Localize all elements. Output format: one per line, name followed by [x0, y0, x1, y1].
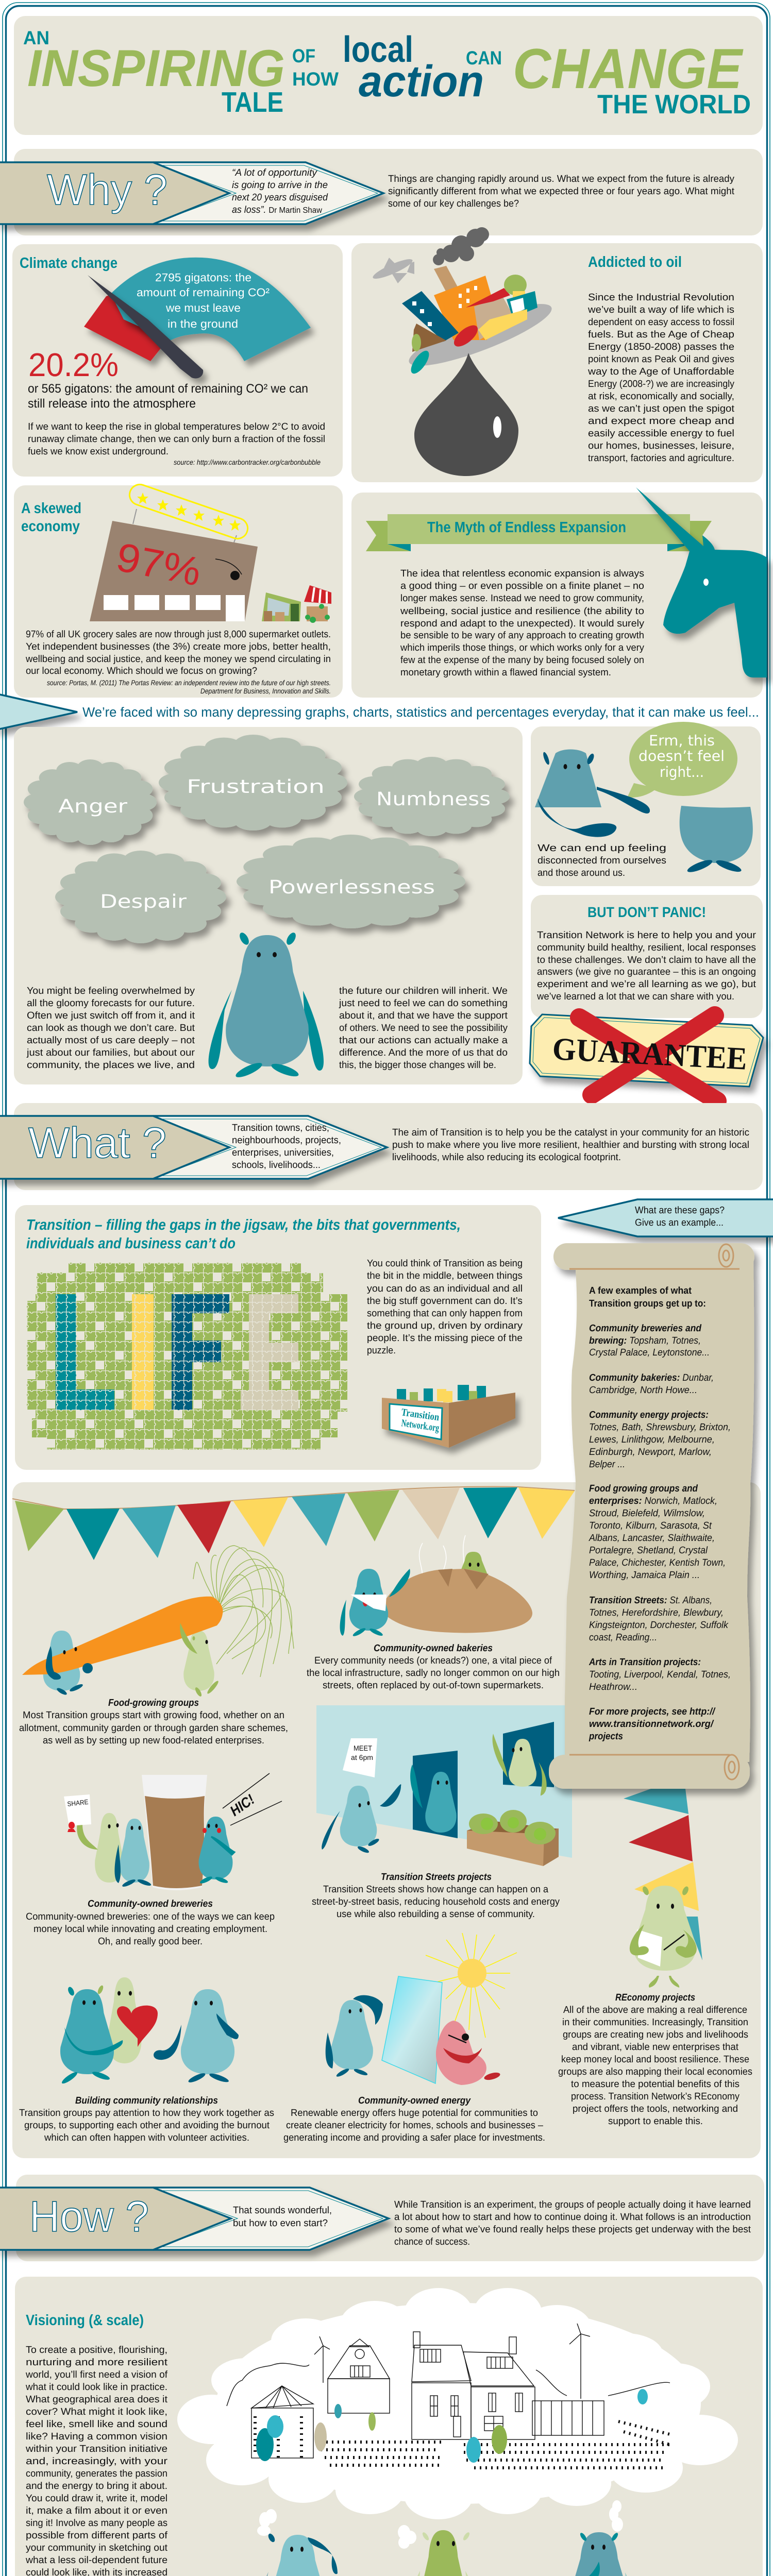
panel: title	[14, 16, 763, 135]
how arrow text: That sounds wonderful,	[233, 2205, 332, 2216]
panel: why	[0, 149, 763, 235]
oil text: transport, factories and agriculture.	[588, 453, 734, 464]
scroll text: For more projects, see http://	[589, 1706, 716, 1717]
energy text: generating income and providing a safer place for investments.	[283, 2132, 545, 2143]
jigsaw text: the ground up, driven by ordinary	[367, 1320, 523, 1331]
heading	[26, 1217, 461, 1252]
reconomy text: REconomy projects	[615, 1992, 695, 2003]
climate text: runaway climate change, then we can only burn a fraction of the fossil	[28, 434, 325, 445]
cloud: frustration	[159, 735, 347, 831]
visioning text: nurturing and more resilient	[26, 2357, 168, 2368]
quote: is going to arrive in the	[232, 180, 328, 191]
feelings text: that our actions can actually make a	[339, 1035, 508, 1046]
oil text: easily accessible energy to fuel	[588, 428, 734, 439]
feelings text: of others. We need to see the possibility	[339, 1023, 508, 1033]
scroll text: Transition Streets: St. Albans,	[589, 1595, 712, 1606]
reconomy text: in their communities. Increasingly, Transition	[562, 2017, 748, 2028]
visioning text: community, generates the passion	[26, 2468, 167, 2479]
jigsaw text: puzzle.	[367, 1345, 396, 1356]
ribbon heading: The Myth of Endless Expansion	[427, 519, 626, 536]
scroll text: Tooting, Liverpool, Kendal, Totnes,	[589, 1669, 731, 1680]
visioning text: feel like, smell like and sound	[26, 2419, 167, 2430]
streets text: street-by-street basis, reducing household costs and energy	[312, 1896, 560, 1907]
heading: BUT DON’T PANIC!	[587, 904, 706, 920]
title text	[23, 27, 751, 120]
climate text: If we want to keep the rise in global temperatures below 2°C to avoid	[28, 421, 325, 432]
panic text: we’ve learned a lot that we can share with you.	[536, 991, 734, 1002]
why intro text: significantly different from what we expected three or four years ago. What might	[388, 186, 735, 197]
cloud: anger: Anger	[58, 796, 127, 817]
heading: A skewed	[21, 500, 81, 517]
breweries text: Community-owned breweries	[88, 1899, 213, 1909]
icon: supermarket	[90, 482, 258, 621]
energy text	[283, 2095, 545, 2143]
heading: Visioning (& scale)	[26, 2312, 144, 2329]
title text: CAN	[466, 47, 502, 69]
bunting right side	[624, 1789, 702, 1960]
heading: how: How ?	[29, 2192, 149, 2241]
icon: crossed-out guarantee: GUARANTEE	[551, 1031, 748, 1077]
how intro text: chance of success.	[394, 2236, 470, 2247]
arrow: why banner	[0, 162, 383, 224]
relationships text	[19, 2095, 274, 2143]
feelings text: Often we just switch off from it, and it	[27, 1010, 195, 1021]
reconomy text: to measure the potential benefits of this	[571, 2079, 740, 2090]
quote: as loss”. Dr Martin Shaw	[232, 205, 322, 215]
skewed economy text: Yet independent businesses (the 3%) create more jobs, better health,	[26, 641, 331, 652]
reconomy text: groups are also mapping their local economies	[558, 2066, 752, 2077]
how intro text	[394, 2199, 751, 2247]
myth text: few at the expense of the many by being focused solely on	[400, 655, 644, 666]
bakeries text: streets, often replaced by out-of-town supermarkets.	[323, 1680, 544, 1691]
oil text: as we can’t just open the spigot	[588, 403, 735, 414]
myth text: The idea that relentless economic expansion is always	[400, 568, 644, 579]
icon: pint of beer and brewers	[64, 1773, 282, 1890]
scroll text: Heathrow...	[589, 1682, 637, 1692]
heading: Climate change	[20, 255, 117, 272]
oil text: point known as Peak Oil and gives	[588, 354, 734, 365]
visioning text: You could draw it, write it, model	[26, 2493, 167, 2504]
reconomy text: support to enable this.	[608, 2116, 703, 2127]
scroll text: Transition groups get up to:	[589, 1298, 706, 1309]
cloud: despair: Despair	[100, 891, 187, 912]
oil text: Energy (1850-2008) passes the	[588, 342, 734, 352]
cloud: frustration: Frustration	[187, 776, 325, 798]
what arrow text	[232, 1123, 341, 1171]
scroll text: Belper ...	[589, 1459, 625, 1470]
cloud: numbness: Numbness	[376, 789, 491, 810]
feelings text: the future our children will inherit. We	[339, 986, 508, 996]
jigsaw text: the bit in the middle, between things	[367, 1270, 523, 1281]
reconomy text: groups are creating new jobs and livelihoods	[563, 2029, 748, 2040]
panel: feelings	[14, 727, 523, 1084]
food-growing text: Most Transition groups start with growing food, whether on an	[23, 1710, 284, 1721]
title text: THE WORLD	[597, 90, 751, 120]
icon: reconomy character with clipboard	[630, 1886, 697, 1988]
scroll text: Cambridge, North Howe...	[589, 1385, 697, 1396]
icon: solar panel and sun	[326, 1933, 517, 2085]
umbrella label: amount of remaining CO²	[137, 286, 270, 299]
streets text: Transition Streets shows how change can happen on a	[323, 1884, 548, 1895]
feelings text: just about our families, but about our	[26, 1047, 195, 1058]
title text: CHANGE	[513, 37, 744, 100]
visioning text	[25, 2345, 168, 2576]
panic text: to these challenges. We don’t claim to have all the	[537, 955, 756, 965]
disconnected text	[537, 843, 666, 878]
breweries text: Community-owned breweries: one of the ways we can keep	[26, 1911, 275, 1922]
panel: how	[0, 2175, 764, 2261]
icon: supermarket: 97%	[113, 534, 205, 595]
heading: Addicted to oil	[588, 254, 682, 270]
scroll text: Totnes, Herefordshire, Blewbury,	[589, 1607, 724, 1618]
bakeries text: Community-owned bakeries	[374, 1643, 493, 1654]
icon: carrot and food growers	[22, 1546, 294, 1698]
energy text: Community-owned energy	[358, 2095, 471, 2106]
statistic caption	[28, 382, 308, 411]
why intro text: Things are changing rapidly around us. What we expect from the future is already	[388, 174, 734, 184]
panic text	[536, 930, 757, 1002]
character: overwhelmed	[209, 931, 324, 1080]
umbrella label: we must leave	[165, 301, 241, 314]
myth text: be sensible to be wary of any approach to creating growth	[400, 630, 644, 641]
scroll text: enterprises: Norwich, Matlock,	[589, 1496, 717, 1506]
visioning text: and the energy to bring it about.	[26, 2481, 167, 2492]
panel: what	[0, 1103, 763, 1190]
scroll text: Totnes, Bath, Shrewsbury, Brixton,	[589, 1422, 731, 1433]
how arrow text: but how to even start?	[233, 2218, 328, 2229]
title text: OF	[292, 45, 315, 66]
title text: AN	[23, 27, 49, 48]
scroll text: Community breweries and	[589, 1323, 701, 1334]
how arrow text	[233, 2205, 332, 2229]
feelings text: community, the places we live, and	[27, 1060, 195, 1071]
scroll of examples	[549, 1243, 754, 1789]
what intro text: The aim of Transition is to help you be the catalyst in your community for an historic	[392, 1127, 749, 1138]
arrow: what are these gaps: What are these gaps?	[635, 1205, 725, 1216]
umbrella label: in the ground	[167, 317, 238, 330]
relationships text: which can often happen with volunteer activities.	[44, 2132, 249, 2143]
bunting	[12, 1487, 575, 1560]
scroll text: Community energy projects:	[589, 1410, 709, 1420]
cloud: powerlessness: Powerlessness	[268, 877, 435, 898]
food-growing text: as well as by setting up new food-related enterprises.	[43, 1735, 264, 1746]
heading	[21, 500, 81, 535]
visioning text: what it could look like in practice.	[25, 2382, 167, 2393]
breweries text	[26, 1899, 275, 1947]
myth text: a good thing – or even possible on a finite planet – no	[400, 581, 644, 591]
visioning text: What geographical area does it	[26, 2394, 168, 2405]
scroll text: Palace, Chichester, Kentish Town,	[589, 1557, 726, 1568]
what arrow text: neighbourhoods, projects,	[232, 1135, 341, 1146]
energy text: Renewable energy offers huge potential for communities to	[291, 2108, 538, 2119]
oil text: dependent on easy access to fossil	[588, 317, 734, 328]
what intro text	[392, 1127, 749, 1163]
arrow: how banner	[0, 2188, 389, 2250]
scroll text: Albans, Lancaster, Slaithwaite,	[589, 1533, 715, 1544]
arrow: what are these gaps: Give us an example...	[635, 1217, 724, 1228]
food-growing text: allotment, community garden or through garden share schemes,	[19, 1723, 288, 1734]
scroll text: Toronto, Kilburn, Sarasota, St	[589, 1520, 712, 1531]
umbrella label	[137, 271, 270, 330]
skewed economy text: 97% of all UK grocery sales are now through just 8,000 supermarket outlets.	[26, 629, 331, 640]
how intro text: While Transition is an experiment, the groups of people actually doing it have learned	[394, 2199, 751, 2210]
panel: skewed economy	[14, 482, 343, 698]
scroll text: Stroud, Bielefeld, Wilmslow,	[589, 1508, 705, 1519]
scroll text: A few examples of what	[589, 1285, 692, 1296]
climate text: source: http://www.carbontracker.org/carbonbubble	[174, 458, 321, 466]
food-growing text: Food-growing groups	[108, 1698, 199, 1708]
icon: oil drop	[414, 353, 518, 476]
scroll text: brewing: Topsham, Totnes,	[589, 1335, 701, 1346]
bakeries text: Every community needs (or kneads?) one, a vital piece of	[314, 1655, 552, 1666]
icon: plane	[371, 256, 414, 283]
skewed economy text: Department for Business, Innovation and Skills.	[200, 687, 331, 695]
heading: Transition – filling the gaps in the jigsaw, the bits that governments,	[26, 1217, 461, 1233]
jigsaw text	[367, 1258, 523, 1356]
visioning text: world, you’ll first need a vision of	[25, 2369, 168, 2380]
oil text: at risk, economically and socially,	[588, 391, 734, 402]
title text: INSPIRING	[27, 40, 285, 97]
title text: local	[343, 29, 413, 70]
feelings text: You might be feeling overwhelmed by	[27, 986, 195, 996]
umbrella label: 2795 gigatons: the	[155, 271, 251, 284]
icon: crossed-out guarantee	[530, 1014, 763, 1101]
jigsaw text: the big stuff government can do. It’s	[367, 1296, 523, 1307]
jigsaw text: something that can only happen from	[367, 1308, 523, 1319]
climate text: fuels we know exist underground.	[28, 446, 169, 457]
heading: economy	[21, 518, 80, 535]
disconnected text: disconnected from ourselves	[537, 855, 666, 866]
what intro text: push to make where you live more resilient, healthier and bursting with strong local	[392, 1140, 749, 1150]
arrow: feelings banner	[0, 694, 77, 730]
energy text: create cleaner electricity for homes, schools and businesses –	[286, 2120, 543, 2131]
streets text	[312, 1872, 560, 1920]
heading: individuals and business can’t do	[26, 1235, 236, 1252]
speech bubble: Erm, this	[649, 732, 715, 749]
character: steel blue visionary	[564, 2532, 640, 2576]
statistic: 20.2%	[28, 346, 119, 383]
disconnected text: We can end up feeling	[537, 843, 666, 854]
relationships text: groups, to supporting each other and avoiding the burnout	[24, 2120, 270, 2131]
scroll text: www.transitionnetwork.org/	[589, 1719, 714, 1730]
panic text: community build healthy, resilient, local responses	[537, 942, 756, 953]
quote	[232, 167, 328, 215]
scroll text: projects	[589, 1731, 623, 1742]
myth text: longer makes sense. Instead we need to grow community,	[400, 593, 644, 604]
thought cloud	[177, 2288, 738, 2549]
arrow: what are these gaps	[558, 1199, 773, 1236]
visioning text: like? Having a common vision	[26, 2431, 167, 2442]
reconomy text: project offers the tools, networking and	[573, 2104, 738, 2114]
myth text	[400, 568, 645, 678]
icon: bakery loaf and bakers	[340, 1535, 532, 1637]
relationships text: Transition groups pay attention to how they work together as	[19, 2108, 274, 2119]
speech bubble: doesn’t feel	[638, 748, 725, 765]
icon: pint of beer and brewers: SHARE	[67, 1798, 89, 1808]
scroll text: Worthing, Jamaica Plain ...	[589, 1570, 700, 1581]
cloud: despair	[55, 851, 226, 943]
scroll text	[589, 1285, 731, 1742]
panic text: answers (we give no guarantee – this is an ongoing	[537, 967, 756, 977]
panel: visioning	[15, 2277, 763, 2576]
why intro text: some of our key challenges be?	[388, 198, 519, 209]
cloud: powerlessness	[237, 835, 465, 928]
oil text: way to the Age of Unaffordable	[587, 366, 734, 377]
relationships text: Building community relationships	[75, 2095, 218, 2106]
panel: myth of endless expansion	[351, 487, 767, 698]
reconomy text	[558, 1992, 752, 2127]
umbrella chart	[84, 258, 311, 379]
title text: TALE	[222, 86, 283, 118]
jigsaw text: you can do as an individual and all	[367, 1283, 523, 1294]
icon: smoke	[433, 227, 489, 265]
oil text: fuels. But as the Age of Cheap	[588, 329, 734, 340]
how intro text: to some of what we’ve found really helps these projects get underway with the best	[394, 2224, 751, 2235]
oil text: and expect more cheap and	[588, 416, 734, 427]
scroll text: Arts in Transition projects:	[589, 1657, 701, 1668]
myth text: respond and adapt to the unexpected). It would surely	[400, 618, 645, 629]
bakeries text: the local infrastructure, sadly no longer common on our high	[307, 1668, 560, 1679]
ribbon heading	[366, 514, 712, 551]
jigsaw spelling life	[27, 1263, 347, 1450]
feelings text: can look as though we don’t care. But	[27, 1023, 195, 1033]
streets text: use while also rebuilding a sense of community.	[337, 1909, 535, 1920]
scroll text: Edinburgh, Newport, Marlow,	[589, 1447, 712, 1458]
feelings text: just need to feel we can do something	[339, 998, 508, 1009]
what arrow text: enterprises, universities,	[232, 1147, 334, 1158]
what intro text: livelihoods, while also reducing its ecological footprint.	[392, 1152, 621, 1163]
scroll text: Community bakeries: Dunbar,	[589, 1372, 714, 1383]
scroll text: Portalegre, Shetland, Crystal	[589, 1545, 708, 1556]
scroll text: Kingsteignton, Dorchester, Suffolk	[589, 1620, 729, 1631]
skewed economy text: wellbeing and social justice, and keep the money we spend circulating in	[25, 654, 331, 665]
disconnected text: and those around us.	[537, 868, 625, 878]
sketch: vision of a town	[227, 2324, 670, 2468]
panel: project examples	[12, 1482, 761, 2158]
visioning text: sing it! Involve as many people as	[26, 2518, 167, 2529]
statistic caption: or 565 gigatons: the amount of remaining CO² we can	[28, 382, 308, 396]
character: green visionary	[409, 2530, 478, 2576]
arrow: what banner	[0, 1116, 387, 1179]
visioning text: what a less oil-dependent future	[25, 2555, 167, 2566]
banner text: We’re faced with so many depressing graphs, charts, statistics and percentages everyday, that it can make us feel...	[82, 704, 759, 720]
oil text: Energy (2008-?) we are increasingly	[588, 379, 734, 389]
jigsaw text: people. It’s the missing piece of the	[367, 1333, 523, 1344]
scroll text: Lewes, Linlithgow, Melbourne,	[589, 1434, 715, 1445]
speech bubble	[627, 722, 737, 798]
speech bubble: right...	[660, 764, 704, 781]
panel: but don't panic	[531, 895, 763, 1018]
icon: transition street scene	[316, 1705, 572, 1866]
icon: city on oil drop	[402, 266, 557, 377]
reconomy text: All of the above are making a real difference	[563, 2005, 747, 2015]
icon: transition street scene: at 6pm	[351, 1753, 373, 1761]
feelings text: actually most of us care deeply – not	[27, 1035, 195, 1046]
feelings text	[26, 986, 508, 1071]
what arrow text: Transition towns, cities,	[232, 1123, 329, 1133]
myth text: monetary growth within a flawed financial system.	[400, 667, 611, 678]
panel: climate change	[12, 244, 343, 477]
character: blue visionary	[254, 2533, 338, 2576]
visioning text: it, make a film about it or even	[26, 2505, 167, 2516]
visioning text: your community in sketching out	[26, 2543, 168, 2553]
icon: box of puzzle pieces: Transition	[400, 1406, 440, 1423]
bakeries text	[307, 1643, 560, 1691]
oil text: our homes, businesses, leisure,	[588, 440, 734, 451]
scroll text: coast, Reading...	[589, 1632, 657, 1643]
panel: addicted to oil	[351, 227, 763, 482]
heading: what: What ?	[28, 1118, 166, 1167]
title text: action	[359, 57, 484, 106]
character: split top half	[535, 749, 650, 837]
title text: HOW	[292, 69, 339, 90]
visioning text: within your Transition initiative	[25, 2444, 167, 2454]
quote: next 20 years disguised	[232, 192, 328, 203]
skewed economy text: our local economy. Which should we focus on growing?	[26, 666, 257, 676]
panic text: experiment and we’re all learning as we go), but	[537, 979, 757, 990]
icon: small shops	[262, 585, 331, 623]
skewed economy text	[25, 629, 331, 695]
climate text	[28, 421, 325, 466]
scroll text: Food growing groups and	[589, 1483, 698, 1494]
panic text: Transition Network is here to help you and your	[537, 930, 757, 941]
scroll text: Crystal Palace, Leytonstone...	[589, 1347, 710, 1358]
oil text: Since the Industrial Revolution	[588, 292, 734, 303]
reconomy text: and vibrant, viable new enterprises that	[572, 2042, 739, 2053]
heading: why: Why ?	[47, 165, 167, 214]
jigsaw text: You could think of Transition as being	[367, 1258, 523, 1269]
cloud: numbness	[354, 757, 510, 836]
icon: box of puzzle pieces	[382, 1385, 515, 1448]
myth text: wellbeing, social justice and resilience (the ability to	[400, 606, 644, 617]
reconomy text: keep money local and boost resilience. These	[561, 2054, 749, 2065]
feelings text: about it, and that we have the support	[339, 1010, 508, 1021]
feelings text: difference. And the more of us that do	[339, 1047, 508, 1058]
icon: pint of beer and brewers: HIC!	[227, 1791, 257, 1819]
visioning text: and, increasingly, with your	[26, 2456, 168, 2467]
food-growing text	[19, 1698, 288, 1746]
panel: disconnected	[531, 722, 761, 886]
feelings text: this, the bigger those changes will be.	[339, 1060, 496, 1071]
icon: transition street scene: MEET	[354, 1744, 372, 1752]
visioning text: cover? What might it look like,	[26, 2406, 167, 2417]
how intro text: a lot about how to start and how to continue doing it. What follows is an introduction	[394, 2212, 751, 2223]
oil text: we’ve built a way of life which is	[587, 304, 734, 315]
why intro text	[388, 174, 735, 209]
cloud: anger	[24, 759, 157, 845]
icon: box of puzzle pieces: Network.org	[400, 1417, 440, 1434]
skewed economy text: source: Portas, M. (2011) The Portas Review: an independent review into the future of our high streets.	[47, 679, 331, 687]
quote: “A lot of opportunity	[232, 167, 317, 178]
what arrow text: schools, livelihoods...	[232, 1160, 321, 1171]
streets text: Transition Streets projects	[381, 1872, 492, 1883]
myth text: which imperils those things, or which works only for a very	[400, 642, 644, 653]
feelings text: all the gloomy forecasts for our future.	[27, 998, 195, 1009]
breweries text: Oh, and really good beer.	[98, 1936, 203, 1947]
visioning text: To create a positive, flourishing,	[26, 2345, 167, 2355]
oil text	[587, 292, 735, 464]
icon: community relationships characters	[60, 1977, 239, 2085]
breweries text: money local while innovating and creating employment.	[33, 1924, 267, 1935]
statistic caption: still release into the atmosphere	[28, 397, 196, 411]
panel: filling the gaps	[15, 1205, 541, 1470]
reconomy text: process. Transition Network’s REconomy	[571, 2091, 740, 2102]
icon: unicorn	[636, 487, 767, 677]
visioning text: possible from different parts of	[26, 2530, 168, 2541]
character: split bottom half	[680, 806, 753, 874]
